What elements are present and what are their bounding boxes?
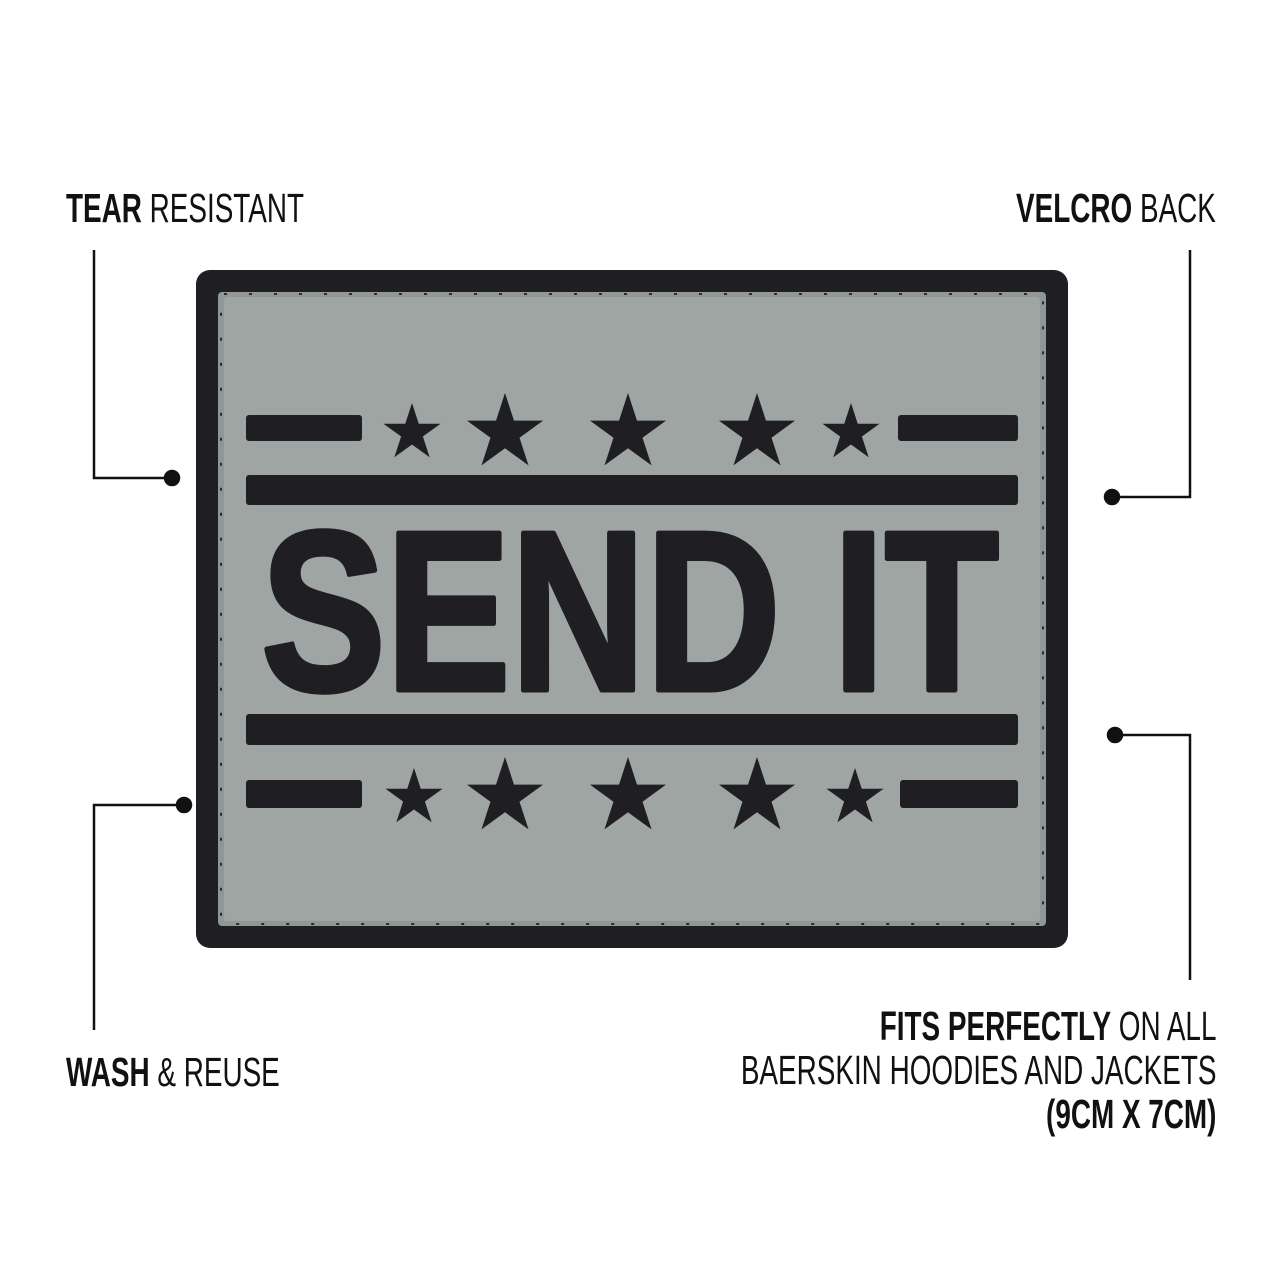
label: fits perfectly	[740, 1003, 1216, 1137]
title: SEND IT: SEND IT	[261, 485, 999, 739]
callout line: fits	[1108, 728, 1190, 980]
callout line: wash	[94, 798, 191, 1030]
label: fits perfectly: FITS PERFECTLY ON ALL	[879, 1003, 1216, 1049]
label: fits perfectly: BAERSKIN HOODIES AND JACKETS	[740, 1047, 1216, 1093]
label: velcro back: VELCRO BACK	[1016, 185, 1216, 231]
label: fits perfectly: (9CM X 7CM)	[1046, 1091, 1216, 1137]
patch	[196, 270, 1068, 948]
label: tear resistant: TEAR RESISTANT	[66, 185, 304, 231]
label: wash & reuse: WASH & REUSE	[66, 1049, 280, 1095]
bottom bars and stars	[246, 714, 1018, 745]
callout line: velcro	[1105, 250, 1190, 504]
top bars and stars	[246, 415, 362, 441]
callout line: tear	[94, 250, 179, 485]
